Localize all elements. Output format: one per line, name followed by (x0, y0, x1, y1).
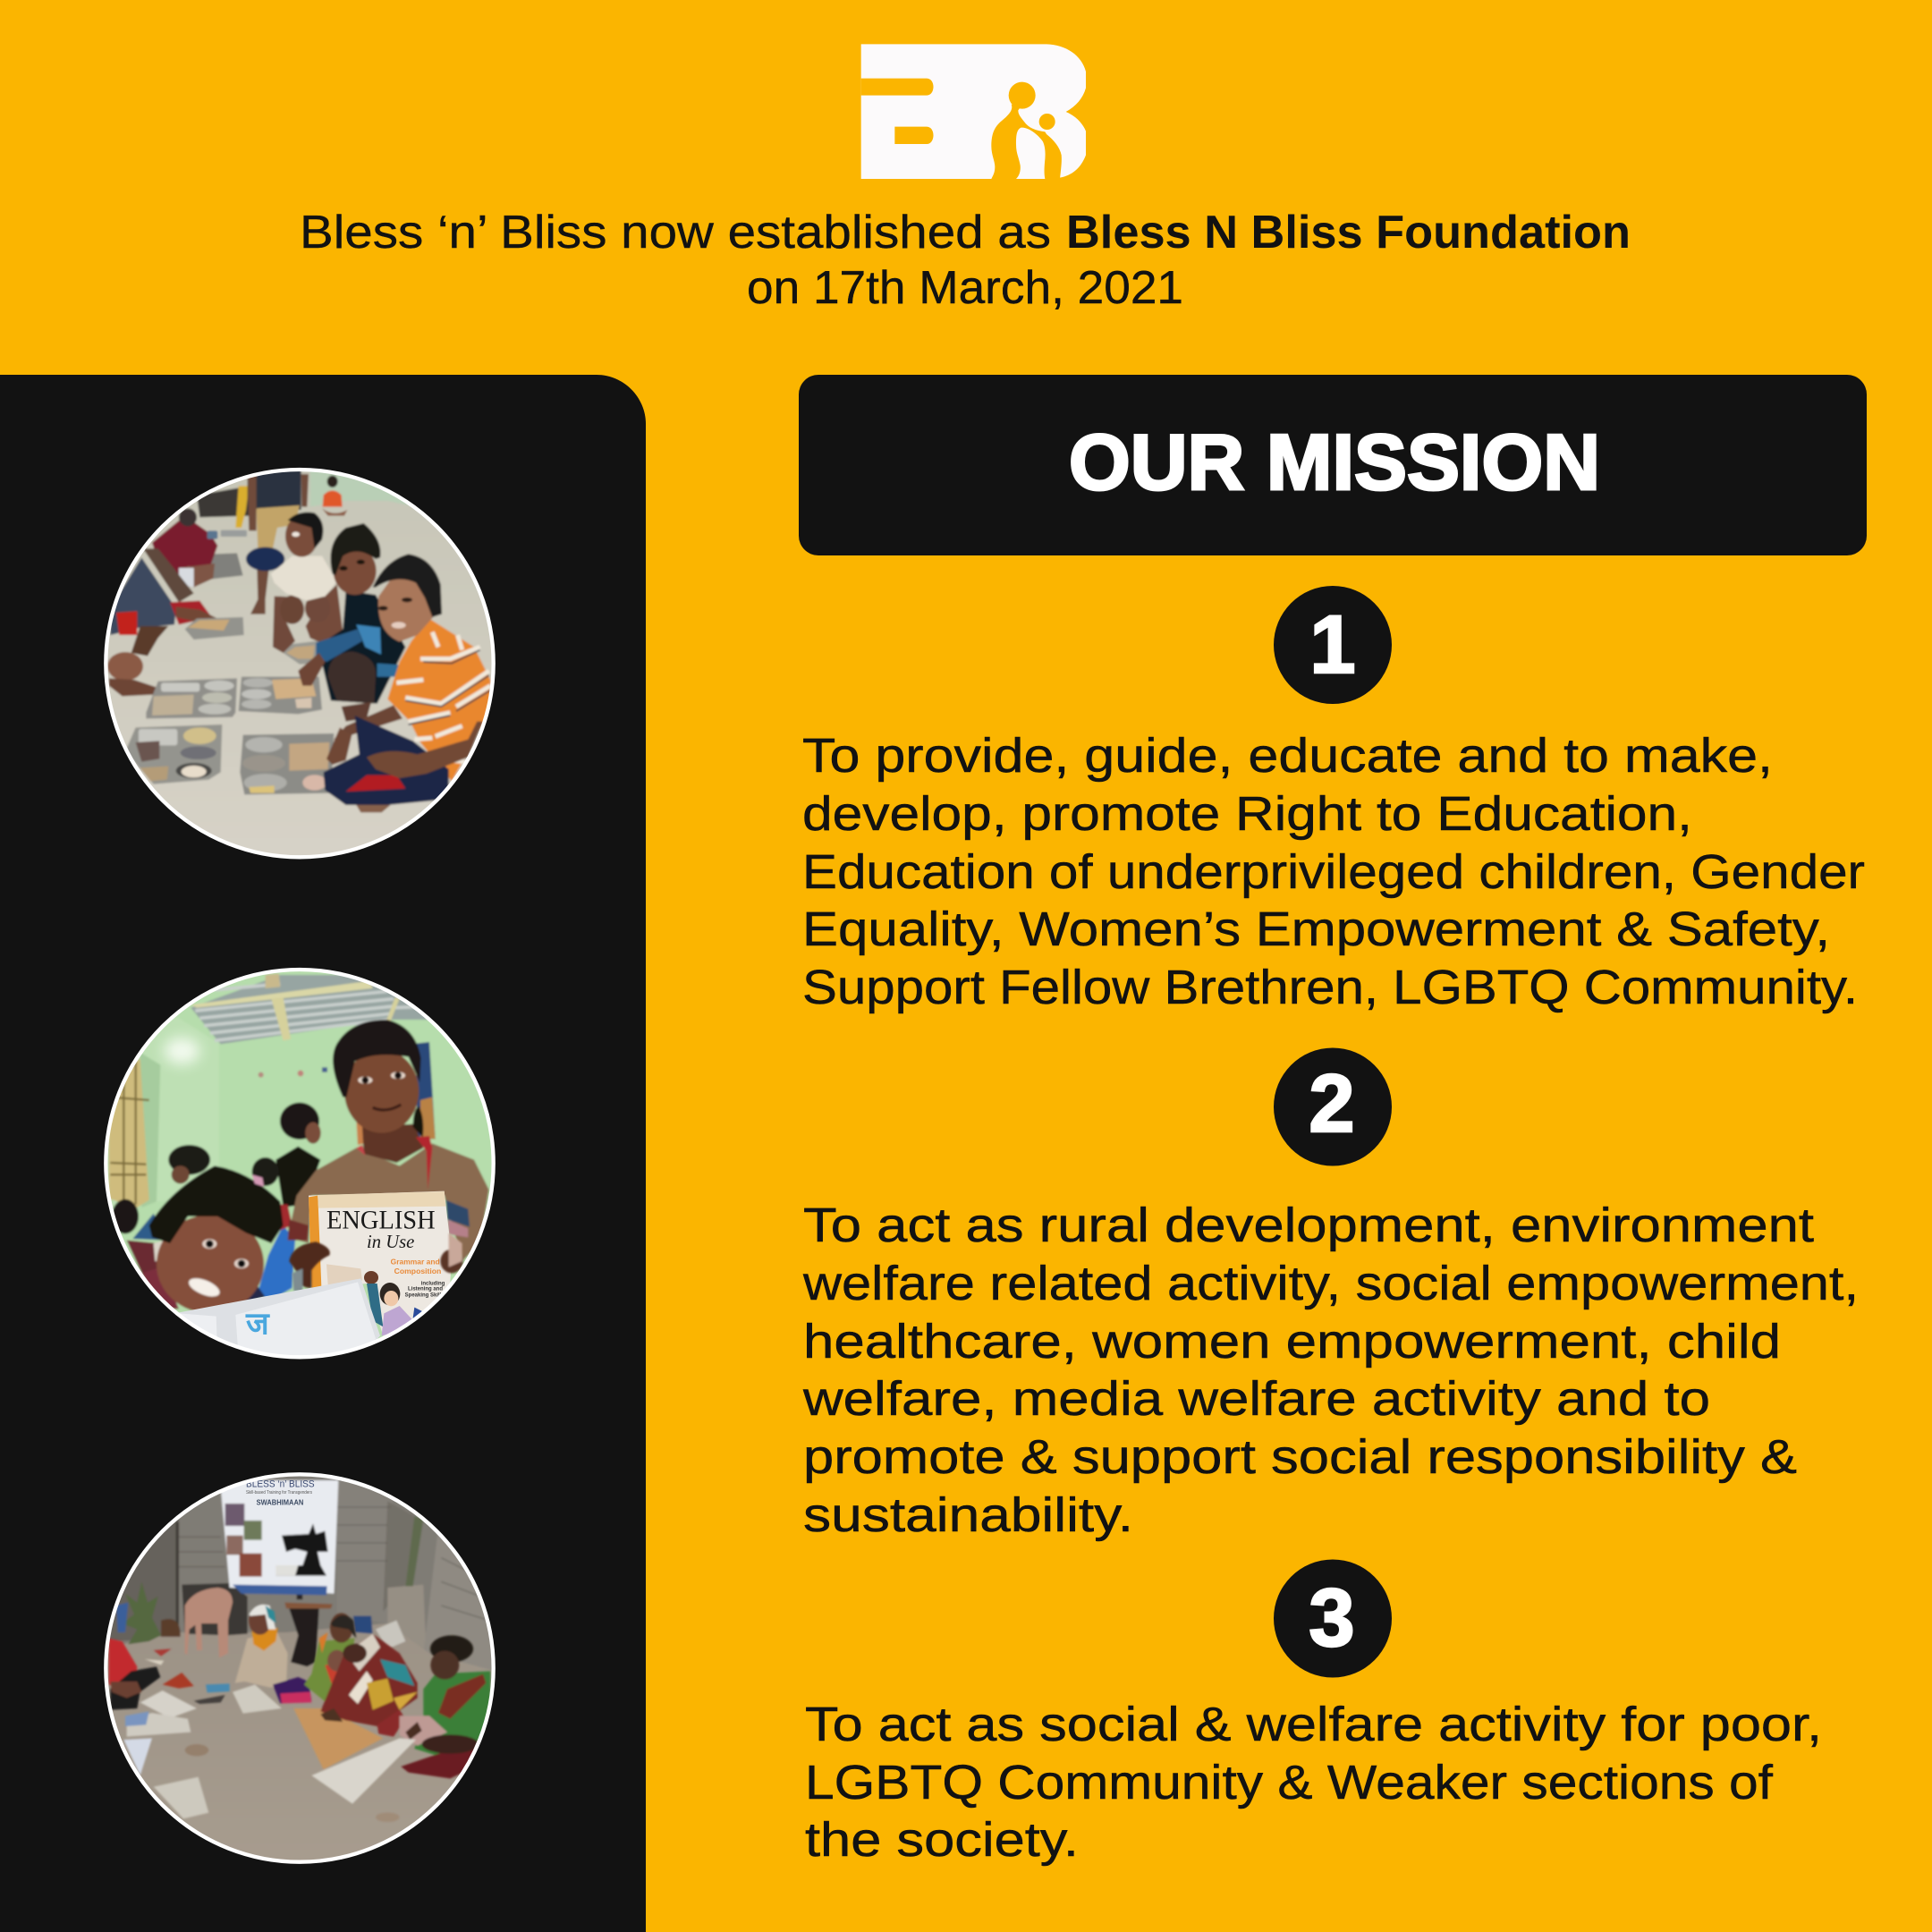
logo: Bless N Bliss (860, 44, 1086, 179)
number badge 2 (1274, 1048, 1392, 1166)
header text: Bless N Bliss Foundation (1066, 207, 1631, 258)
mission text 1 (802, 729, 1865, 1014)
white paper (311, 1738, 416, 1804)
sewing table (284, 1603, 333, 1608)
banner (220, 1480, 338, 1594)
number badge 1 (1274, 586, 1392, 704)
mission text 2: sustainability. (803, 1488, 1133, 1542)
standing child (248, 468, 301, 510)
mission text 2: welfare, media welfare activity and to (802, 1372, 1710, 1426)
plate under girl (284, 641, 318, 665)
book: English in Use: Composition (394, 1267, 441, 1275)
woman with child (304, 1639, 355, 1704)
papers (140, 1690, 197, 1718)
left woman (109, 1639, 137, 1690)
whiteboard: ज (245, 1308, 270, 1342)
chair (185, 1588, 233, 1657)
header text (300, 207, 1631, 314)
woman bending in striped sari (320, 1634, 418, 1726)
mission text 1: develop, promote Right to Education, (802, 787, 1692, 841)
number badge 3 (1274, 1560, 1392, 1678)
mission text 2: healthcare, women empowerment, child (803, 1315, 1781, 1368)
book: English in Use: Listening and (408, 1287, 443, 1292)
mission text 2: promote & support social responsibility & (803, 1430, 1797, 1484)
person in grey (110, 557, 176, 635)
photo: women at a sewing workshop: BLESS ‘n’ BLISS (246, 1479, 315, 1489)
photo: children holding books (104, 968, 496, 1360)
number badge 2: 2 (1309, 1058, 1355, 1149)
book: English in Use: in Use (367, 1233, 414, 1252)
photo: women at a sewing workshop (104, 1472, 496, 1864)
mission text 1: Equality, Women’s Empowerment & Safety, (802, 902, 1830, 956)
mission text 3 (805, 1698, 1822, 1867)
mission text 2 (802, 1199, 1859, 1542)
number badge 1: 1 (1309, 599, 1356, 691)
mission text 3: LGBTQ Community & Weaker sections of (805, 1756, 1774, 1809)
book: English in Use: ENGLISH (326, 1206, 436, 1234)
small child far back (327, 476, 338, 487)
back poster (416, 1042, 436, 1139)
heading box: our mission: OUR MISSION (1069, 418, 1600, 506)
photo: children eating a meal (104, 467, 496, 859)
mission text 3: To act as social & welfare activity for poor, (805, 1698, 1822, 1751)
plant (123, 1581, 161, 1644)
mission text 3: the society. (805, 1813, 1079, 1867)
red-shirted person (151, 519, 218, 575)
panel: photo column (0, 375, 646, 1932)
hand and foot (107, 652, 143, 681)
book: English in Use: Grammar and (391, 1257, 440, 1266)
mission text 1: To provide, guide, educate and to make, (802, 729, 1773, 783)
header text: on 17th March, 2021 (747, 262, 1183, 314)
tray rows back (221, 530, 247, 537)
middle boy (316, 590, 405, 704)
tray (185, 617, 244, 640)
photo: women at a sewing workshop: SWABHIMAAN (257, 1497, 303, 1506)
left smiling boy (141, 1267, 179, 1309)
header text: Bless ‘n’ Bliss now established as (300, 207, 1051, 258)
mission text 1: Support Fellow Brethren, LGBTQ Community. (802, 961, 1858, 1014)
orange-shirt boy (387, 619, 490, 781)
book: English in Use: Speaking Skills (405, 1292, 445, 1298)
heading box: our mission (799, 375, 1867, 555)
woman teaching (235, 1632, 288, 1688)
cabinet and table (182, 1583, 248, 1635)
mission text 2: To act as rural development, environment (803, 1199, 1814, 1252)
tray row behind (208, 530, 217, 539)
woman on the right (414, 1671, 490, 1764)
book: English in Use: including (421, 1282, 445, 1287)
book: English in Use (309, 1191, 452, 1335)
right boy (288, 1143, 489, 1261)
little girl (273, 597, 295, 653)
mission text 1: Education of underprivileged children, Gender (802, 845, 1865, 899)
trays front (146, 678, 237, 718)
whiteboard (179, 1278, 380, 1360)
background children (280, 1103, 319, 1140)
photo: women at a sewing workshop: Skill-based Training for Transgenders (246, 1490, 312, 1496)
board (293, 1708, 383, 1769)
number badge 3: 3 (1309, 1572, 1355, 1664)
blue bag (257, 1225, 295, 1299)
mission text 2: welfare related activity, social empowerment, (802, 1257, 1859, 1310)
